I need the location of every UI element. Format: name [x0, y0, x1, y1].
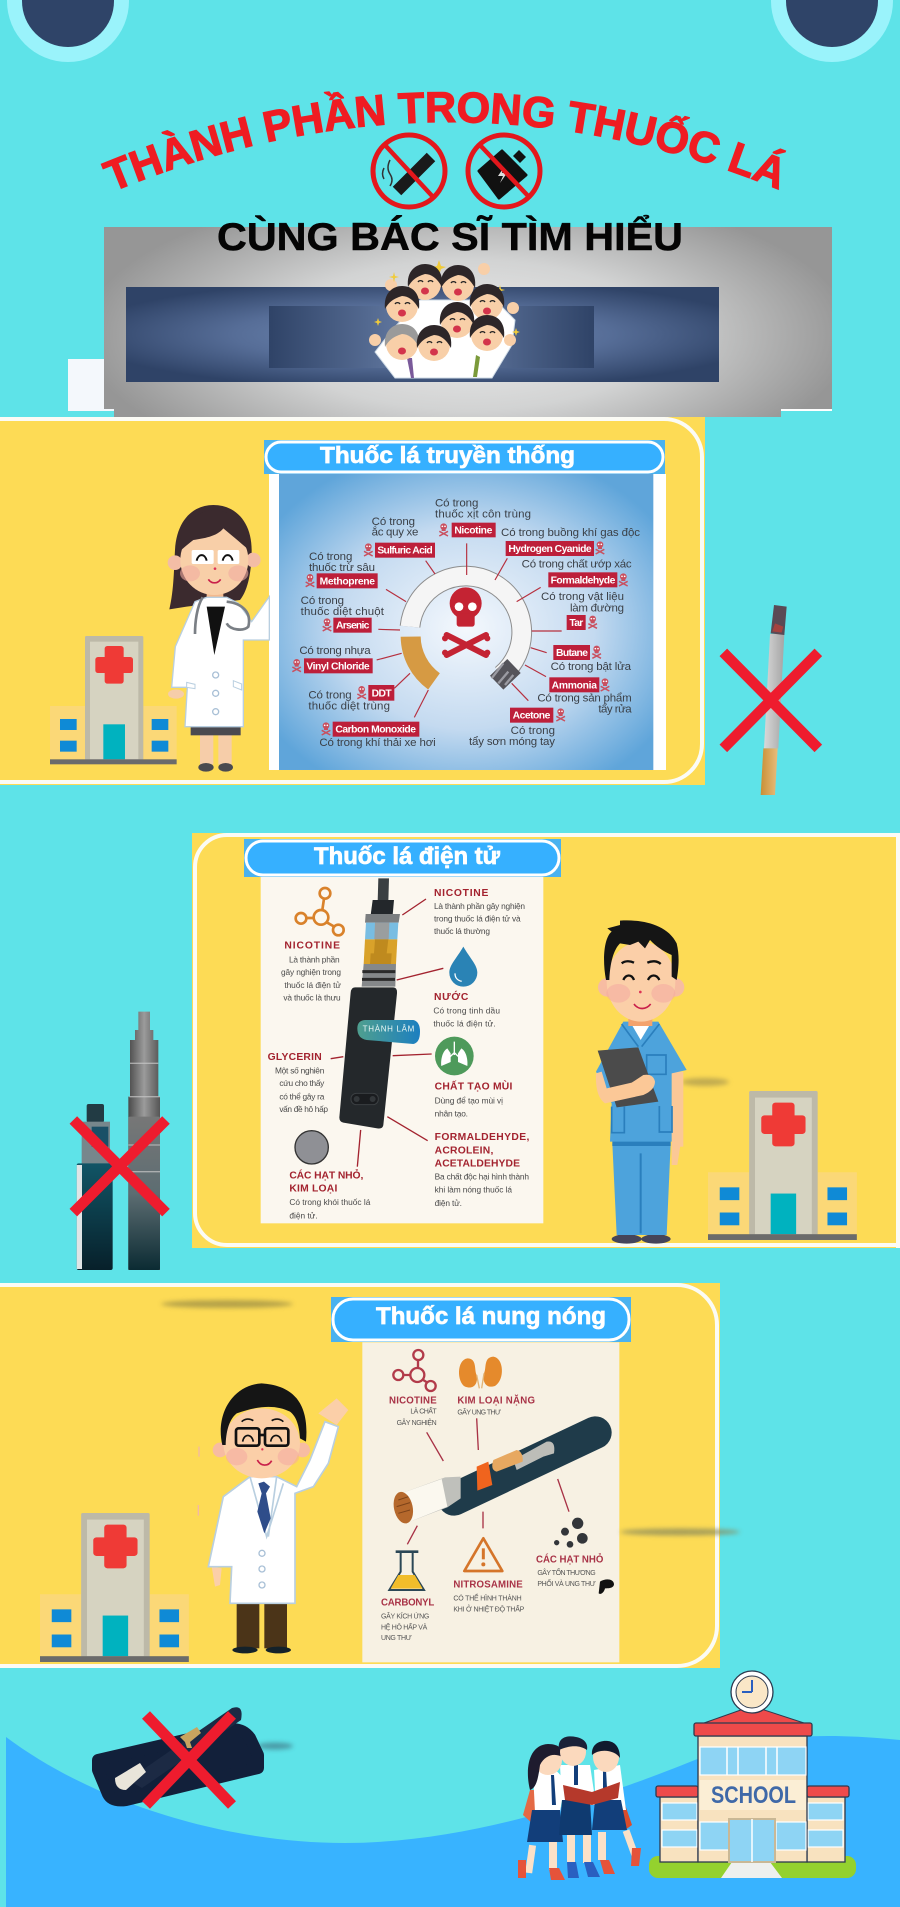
school sign: SCHOOL — [711, 1782, 796, 1809]
heading pill: Thuốc lá nung nóng — [331, 1297, 631, 1342]
illustration: male doctor waving — [198, 1383, 348, 1653]
label: water: thuốc lá điện tử. — [433, 1019, 496, 1029]
illustration: crossed out cigarette — [723, 605, 818, 795]
substance sources: Có trong nhựa — [299, 645, 371, 657]
icon: black lung — [599, 1579, 614, 1594]
label: carbonyl: CARBONYL — [381, 1598, 434, 1609]
illustration: school building — [649, 1671, 856, 1878]
icon: no smoking — [373, 135, 445, 207]
shadow beside heated panel — [620, 1528, 740, 1536]
label: flavouring: Dùng để tạo mùi vị — [435, 1095, 503, 1105]
brand badge — [357, 1020, 420, 1044]
substance sources — [299, 498, 640, 749]
label: particles and metals: điện tử. — [289, 1210, 318, 1220]
heading pill: Thuốc lá nung nóng: Thuốc lá nung nóng — [376, 1303, 606, 1330]
label: particles and metals: KIM LOẠI — [289, 1184, 337, 1195]
shadow above doctor — [161, 1300, 293, 1308]
heading pill: Thuốc lá truyền thống: Thuốc lá truyền thống — [320, 442, 575, 468]
illustration: male nurse — [596, 920, 687, 1244]
top left decoration circle — [7, 0, 129, 62]
skull and crossbones — [442, 587, 490, 656]
icon: kidneys — [459, 1357, 502, 1388]
label: nicotine right: trong thuốc lá điện tử và — [434, 914, 521, 924]
icon: water drop — [449, 947, 477, 987]
substance names: Sulfuric Acid — [377, 546, 433, 557]
label: carbonyl: GÂY KÍCH ỨNG — [381, 1611, 429, 1620]
substance names: Ammonia — [552, 680, 597, 691]
substance names: Carbon Monoxide — [335, 725, 416, 736]
label: glycerin: GLYCERIN — [268, 1052, 322, 1063]
icon: no vaping — [468, 135, 540, 207]
substance sources: tẩy sơn móng tay — [469, 736, 555, 748]
label: formaldehyde acrolein acetaldehyde: Ba chất độc hại hình thành — [435, 1171, 529, 1181]
substance sources: thuốc diệt trùng — [308, 700, 390, 712]
substance sources: thuốc trừ sâu — [309, 562, 375, 574]
title: THÀNH PHẦN TRONG THUỐC LÁ — [100, 91, 786, 190]
substance names: Acetone — [513, 711, 551, 722]
label: nicotine left: và thuốc là thưu — [283, 993, 341, 1003]
label: glycerin: Một số nghiên — [275, 1065, 325, 1075]
label: glycerin — [268, 1052, 328, 1114]
header banner block — [68, 227, 832, 417]
infographic backing — [269, 474, 666, 770]
panel: e-cigarette — [192, 833, 900, 1248]
substance sources: Có trong buồng khí gas độc — [501, 527, 640, 539]
label: water: NƯỚC — [434, 990, 469, 1003]
shadow under nurse arm — [681, 1078, 729, 1086]
label: nicotine — [389, 1395, 437, 1427]
icon: particles — [554, 1518, 588, 1548]
label: glycerin: cứu cho thấy — [279, 1078, 325, 1088]
label: nicotine right: thuốc lá thường — [434, 926, 490, 936]
substance sources: ắc quy xe — [372, 526, 418, 539]
infographic: e-cigarette components — [261, 877, 543, 1223]
infographic: harmful substances — [279, 474, 653, 770]
substance names: Hydrogen Cyanide — [508, 544, 592, 555]
substance sources: Có trong — [308, 689, 352, 701]
label: heavy metals: GÂY UNG THƯ — [457, 1407, 501, 1416]
icon: gray particle — [295, 1131, 328, 1164]
panel: heated tobacco — [0, 1283, 720, 1668]
label: nicotine right: Là thành phần gây nghiện — [434, 901, 525, 911]
label: formaldehyde acrolein acetaldehyde: điện tử. — [435, 1198, 462, 1208]
substance names: Butane — [556, 648, 588, 659]
substance sources: làm đường — [570, 603, 624, 615]
label: flavouring: nhân tạo. — [435, 1108, 468, 1118]
label: glycerin: có thể gây ra — [279, 1091, 325, 1101]
icon: nicotine molecule — [296, 888, 344, 935]
label: nicotine left — [281, 940, 341, 1003]
label: nicotine left: thuốc lá điện tử — [284, 980, 341, 990]
label: nicotine right: NICOTINE — [434, 888, 488, 899]
icon: warning triangle — [464, 1538, 502, 1571]
substance sources: thuốc xịt côn trùng — [435, 508, 531, 520]
top right decoration circle — [771, 0, 893, 62]
substance names: Arsenic — [336, 621, 370, 632]
connector lines — [377, 543, 562, 717]
label: particles and metals: CÁC HẠT NHỎ, — [289, 1168, 363, 1181]
icon: hospital — [50, 636, 177, 764]
connector lines — [331, 899, 443, 1167]
label: nicotine: GÂY NGHIỆN — [397, 1418, 437, 1427]
bottom wave — [6, 1736, 900, 1907]
label: nitrosamine — [453, 1579, 525, 1614]
label: carbonyl: UNG THƯ — [381, 1635, 412, 1642]
substance sources: Có trong — [372, 516, 415, 528]
illustration: female doctor — [168, 505, 269, 772]
label: heavy metals: KIM LOẠI NẶNG — [457, 1395, 535, 1406]
label: nitrosamine: KHI Ở NHIỆT ĐỘ THẤP — [453, 1604, 525, 1614]
label: formaldehyde acrolein acetaldehyde: khi làm nóng thuốc lá — [435, 1185, 512, 1195]
label: heavy metals — [457, 1395, 535, 1416]
substance sources: tẩy rửa — [598, 703, 632, 715]
label: nitrosamine: CÓ THỂ HÌNH THÀNH — [453, 1594, 522, 1603]
clock — [731, 1671, 773, 1713]
illustration: crossed out heated device — [98, 1707, 293, 1805]
substance names: Methoprene — [320, 576, 375, 587]
substance names — [306, 526, 616, 736]
icon: lungs — [435, 1037, 474, 1075]
substance names: Vinyl Chloride — [306, 661, 370, 672]
substance sources: thuốc diệt chuột — [301, 606, 385, 618]
label: small particles — [536, 1553, 604, 1588]
cigarette ring — [410, 576, 522, 685]
illustration: group of doctors cheering — [369, 260, 520, 378]
substance sources: Có trong vật liệu — [541, 591, 624, 603]
icon: flask — [389, 1552, 424, 1590]
substance sources: Có trong sản phẩm — [537, 693, 632, 705]
label: nicotine left: NICOTINE — [284, 940, 340, 951]
small skull icons — [292, 523, 628, 735]
infographic: heated tobacco components — [362, 1342, 619, 1662]
subtitle: CÙNG BÁC SĨ TÌM HIỂU — [217, 214, 683, 259]
illustration: students reading — [518, 1736, 641, 1880]
icon: hospital — [708, 1091, 857, 1240]
label: flavouring — [435, 1079, 512, 1118]
label: small particles: CÁC HẠT NHỎ — [536, 1553, 604, 1565]
heated tobacco stick — [391, 1433, 595, 1525]
label: nicotine: NICOTINE — [389, 1395, 437, 1406]
heading pill: Thuốc lá điện tử: Thuốc lá điện tử — [314, 843, 501, 870]
substance sources: Có trong chất ướp xác — [522, 558, 632, 570]
substance sources: Có trong — [511, 725, 555, 737]
label: nicotine: LÀ CHẤT — [410, 1405, 437, 1415]
label: small particles: PHỔI VÀ UNG THƯ — [537, 1579, 596, 1588]
label: formaldehyde acrolein acetaldehyde: ACROLEIN, — [435, 1145, 493, 1156]
heading pill: Thuốc lá điện tử — [244, 839, 561, 877]
label: nicotine right — [434, 888, 525, 936]
label: carbonyl: HỆ HÔ HẤP VÀ — [381, 1621, 428, 1631]
heading pill: Thuốc lá truyền thống — [264, 440, 665, 474]
illustration: crossed out vape devices — [73, 1012, 166, 1270]
substance names: Formaldehyde — [551, 575, 616, 586]
label: particles and metals: Có trong khói thuốc lá — [289, 1197, 371, 1207]
vape device — [339, 878, 400, 1129]
label: small particles: GÂY TỔN THƯƠNG — [537, 1568, 596, 1577]
substance sources: Có trong bật lửa — [551, 661, 632, 673]
label: formaldehyde acrolein acetaldehyde — [435, 1132, 529, 1208]
connector lines — [407, 1418, 569, 1544]
label: nitrosamine: NITROSAMINE — [453, 1579, 523, 1590]
panel: traditional cigarette — [0, 417, 705, 785]
substance sources: Có trong — [301, 595, 344, 607]
icon: hospital — [40, 1513, 189, 1662]
label: particles and metals — [289, 1168, 371, 1220]
label: nicotine left: Là thành phần — [289, 954, 340, 964]
substance names: Tar — [569, 618, 583, 629]
substance names: Nicotine — [454, 526, 493, 537]
brand badge: THÀNH LÂM — [363, 1025, 414, 1034]
label: carbonyl — [381, 1598, 434, 1642]
label: formaldehyde acrolein acetaldehyde: FORMALDEHYDE, — [435, 1132, 529, 1143]
substance sources: Có trong — [309, 551, 352, 563]
label: water: Có trong tinh dầu — [433, 1005, 500, 1015]
substance labels — [304, 523, 617, 737]
label: formaldehyde acrolein acetaldehyde: ACETALDEHYDE — [435, 1159, 520, 1170]
label: flavouring: CHẤT TẠO MÙI — [435, 1079, 512, 1092]
label: nicotine left: gây nghiện trong — [281, 967, 341, 977]
substance sources: Có trong khí thải xe hơi — [319, 737, 436, 749]
label: glycerin: vấn đề hô hấp — [279, 1104, 328, 1114]
icon: molecule — [393, 1350, 436, 1391]
substance sources: Có trong — [435, 498, 478, 510]
label: water — [433, 990, 500, 1029]
substance names: DDT — [372, 689, 392, 700]
